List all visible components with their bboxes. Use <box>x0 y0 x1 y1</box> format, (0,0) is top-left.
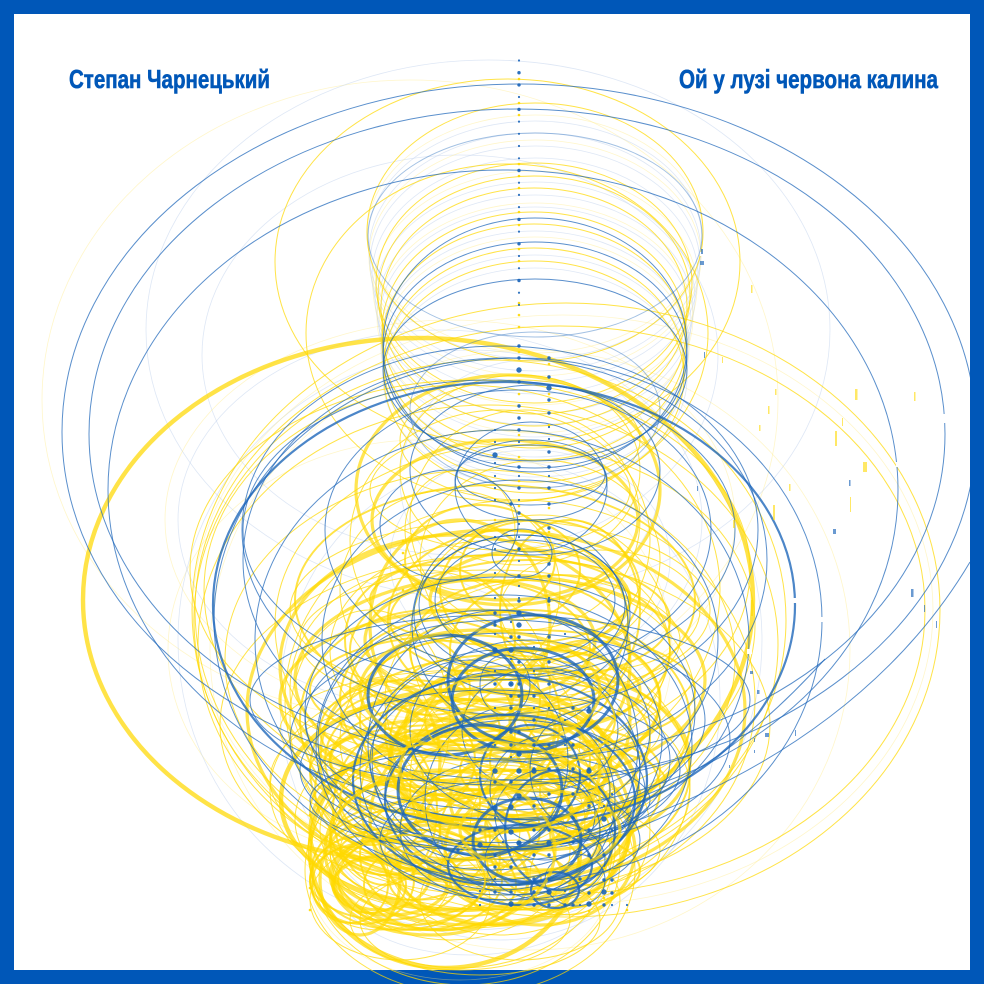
blue note dots: medium <box>458 73 612 905</box>
blue thick rings <box>213 382 795 908</box>
small gaps on ring edges <box>700 252 948 654</box>
yellow overlay rings <box>325 630 620 930</box>
blue thin rings <box>62 84 976 906</box>
yellow thin rings <box>190 79 940 984</box>
vertical ticks: yellow <box>722 285 916 616</box>
title: composer: Степан Чарнецький <box>69 64 270 94</box>
blue note dots: large <box>480 370 604 904</box>
yellow note dots <box>310 79 627 911</box>
yellow thick rings <box>83 338 753 968</box>
blue note dots: small <box>480 60 627 905</box>
yellow medium rings <box>295 485 695 930</box>
vertical ticks: blue <box>697 249 937 768</box>
